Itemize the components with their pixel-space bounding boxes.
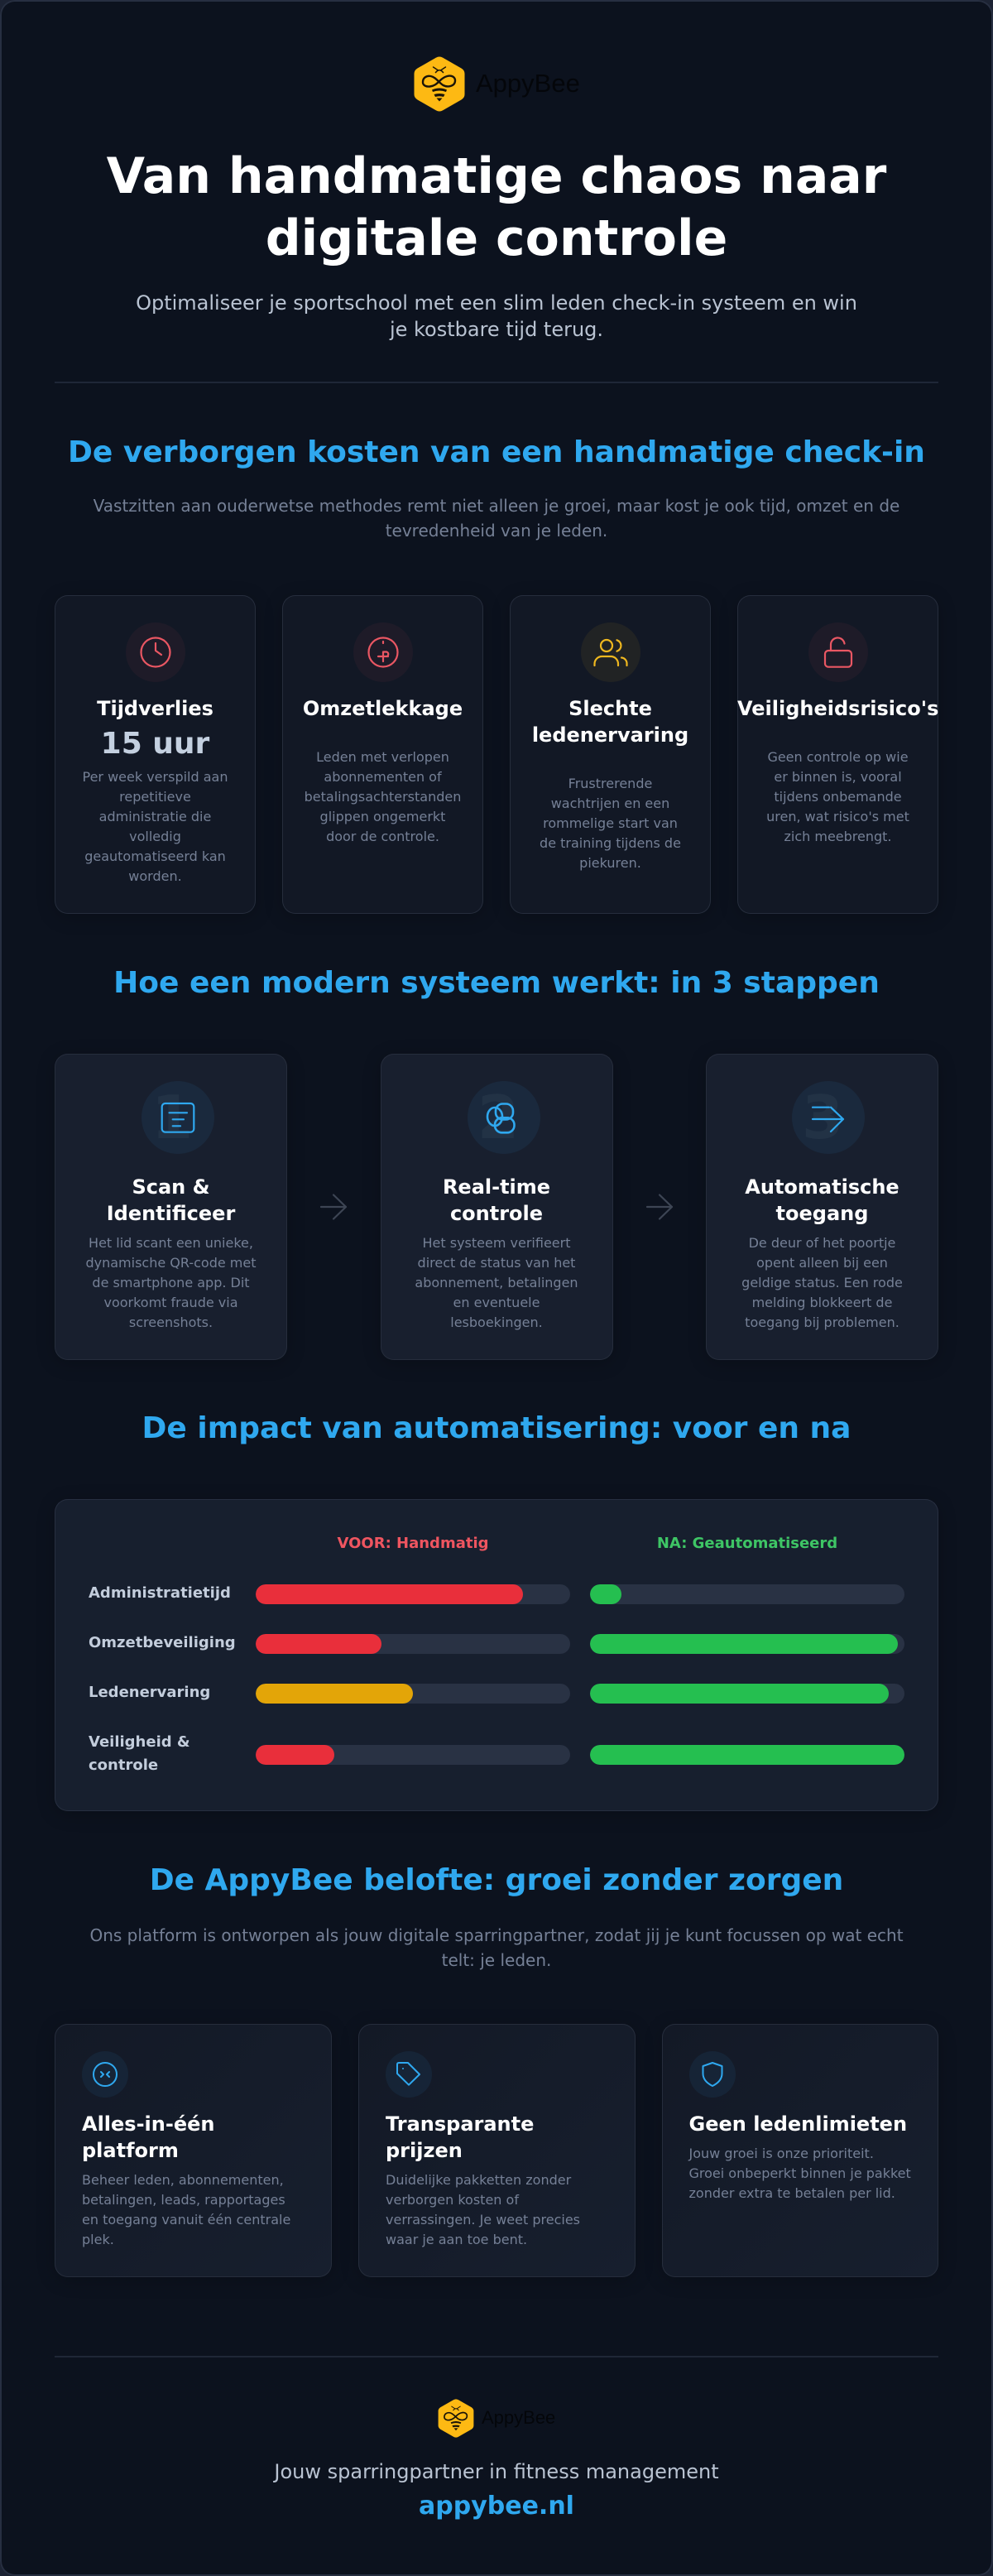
step text: voorkomt fraude via <box>103 1295 238 1310</box>
bar: after 95% <box>590 1684 904 1704</box>
panel: before and after bar chart <box>55 1499 938 1811</box>
panel: Omzetlekkage <box>282 595 483 914</box>
card text: wachtrijen en een <box>551 795 669 811</box>
card title <box>386 2112 534 2162</box>
bar: after 98% <box>590 1634 904 1654</box>
bar: before 40% <box>256 1634 570 1654</box>
card title: Tijdverlies <box>97 697 213 720</box>
step text: Het lid scant een unieke, <box>89 1235 253 1250</box>
row label: Veiligheid en controle: Veiligheid & <box>89 1733 190 1751</box>
panel: step 3 <box>706 1054 938 1360</box>
panel: step 1 <box>55 1054 287 1360</box>
column header: before: VOOR: Handmatig <box>337 1535 488 1552</box>
card text: verrassingen. Je weet precies <box>386 2212 580 2227</box>
step title: toegang <box>776 1202 868 1225</box>
row label: Administratietijd: Administratietijd <box>89 1584 231 1602</box>
step text: geldige status. Een rode <box>741 1275 903 1290</box>
bar: before 50% <box>256 1684 570 1704</box>
title: digitale controle <box>266 209 727 267</box>
step title: Identificeer <box>107 1202 235 1225</box>
card text <box>83 769 228 884</box>
card text: worden. <box>128 868 182 884</box>
card title: Veiligheidsrisico's <box>737 697 938 720</box>
icon: real-time check <box>468 1081 540 1154</box>
subtitle: Optimaliseer je sportschool met een slim leden check-in systeem en win <box>136 291 857 315</box>
card text: er binnen is, vooral <box>774 769 902 785</box>
step text: en eventuele <box>453 1295 540 1310</box>
card text: uren, wat risico's met <box>766 809 909 824</box>
footer tagline: Jouw sparringpartner in fitness management <box>274 2460 719 2483</box>
bar: before 85% <box>256 1584 570 1604</box>
card title: prijzen <box>386 2139 463 2162</box>
step title: Automatische <box>745 1175 899 1199</box>
card text: piekuren. <box>579 855 641 871</box>
row label: Veiligheid en controle <box>89 1733 190 1774</box>
card text: de training tijdens de <box>540 835 681 851</box>
step text: opent alleen bij een <box>756 1255 888 1270</box>
icon: bee hexagon <box>414 56 465 111</box>
step text: De deur of het poortje <box>749 1235 895 1250</box>
row label: Veiligheid en controle: controle <box>89 1757 158 1774</box>
card text: Leden met verlopen <box>316 749 449 765</box>
step text: abonnement, betalingen <box>415 1275 578 1290</box>
step title <box>107 1175 235 1225</box>
card title <box>82 2112 214 2162</box>
card text: Geen controle op wie <box>767 749 909 765</box>
heading: promise: De AppyBee belofte: groei zonder zorgen <box>150 1863 843 1897</box>
card text: Frustrerende <box>568 776 652 791</box>
logo wordmark: AppyBee <box>482 2407 555 2428</box>
card text: waar je aan toe bent. <box>386 2232 527 2247</box>
card text <box>688 2146 911 2200</box>
card text: plek. <box>82 2232 114 2247</box>
card text <box>305 749 461 844</box>
card text: volledig <box>129 829 181 844</box>
card text: geautomatiseerd kan <box>84 848 226 864</box>
step title: Real-time <box>443 1175 550 1199</box>
step title <box>745 1175 899 1225</box>
card text: zich meebrengt. <box>784 829 892 844</box>
intro text: promise: telt: je leden. <box>442 1950 551 1970</box>
step text: lesboekingen. <box>450 1314 543 1329</box>
card title: ledenervaring <box>532 723 688 747</box>
card text: Groei onbeperkt binnen je pakket <box>688 2165 911 2180</box>
card title: Transparante <box>386 2112 534 2136</box>
intro text: hidden costs: tevredenheid van je leden. <box>386 521 607 541</box>
icon: open lock <box>808 622 868 682</box>
card text: glippen ongemerkt <box>320 809 445 824</box>
card title: Omzetlekkage <box>303 697 463 720</box>
arrow: step 2 to 3 <box>646 1194 673 1220</box>
footer link: appybee.nl <box>419 2492 574 2520</box>
heading: three steps: Hoe een modern systeem werkt: in 3 stappen <box>113 966 880 1000</box>
statistic: 15 uur <box>101 727 209 760</box>
intro text: promise: Ons platform is ontworpen als jouw digitale sparringpartner, zodat jij je kunt focussen op wat echt <box>89 1925 904 1945</box>
step text: screenshots. <box>129 1314 213 1329</box>
icon: real-time check: 2 <box>477 1083 519 1152</box>
step text <box>85 1235 257 1329</box>
heading: hidden costs: De verborgen kosten van een handmatige check-in <box>68 435 925 469</box>
card text: Beheer leden, abonnementen, <box>82 2172 284 2187</box>
card text: Per week verspild aan <box>83 769 228 785</box>
icon: scan <box>142 1081 214 1154</box>
card text <box>540 776 681 871</box>
step title: Scan & <box>132 1175 210 1199</box>
card text <box>386 2172 580 2247</box>
icon: coin <box>353 622 413 682</box>
step text <box>415 1235 578 1329</box>
logo wordmark: AppyBee <box>476 69 580 98</box>
card text: en toegang vanuit één centrale <box>82 2212 290 2227</box>
panel: Veiligheidsrisico's <box>737 595 938 914</box>
title: Van handmatige chaos naar <box>107 147 886 205</box>
icon: users <box>581 622 640 682</box>
step text <box>741 1235 903 1329</box>
bar: after 10% <box>590 1584 904 1604</box>
panel: step 2 <box>381 1054 612 1360</box>
card title <box>532 697 688 747</box>
icon: bee hexagon <box>439 2399 473 2438</box>
card text: Duidelijke pakketten zonder <box>386 2172 571 2187</box>
bar: before 25% <box>256 1745 570 1765</box>
card text: zonder extra te betalen per lid. <box>688 2185 895 2200</box>
icon: automatic entry <box>792 1081 865 1154</box>
card text: verborgen kosten of <box>386 2192 519 2207</box>
step title <box>443 1175 550 1225</box>
icon: price tag <box>386 2051 432 2098</box>
step title: controle <box>450 1202 543 1225</box>
footer logo <box>439 2399 555 2438</box>
icon: clock <box>126 622 185 682</box>
bar: after 100% <box>590 1745 904 1765</box>
subtitle <box>136 291 857 341</box>
panel: transparent pricing <box>358 2024 636 2277</box>
card text: abonnementen of <box>324 769 442 785</box>
step text: direct de status van het <box>418 1255 575 1270</box>
icon: automatic entry: 3 <box>802 1083 843 1152</box>
card title: Geen ledenlimieten <box>688 2112 907 2136</box>
card text: tijdens onbemande <box>774 789 902 805</box>
intro text: hidden costs: Vastzitten aan ouderwetse methodes remt niet alleen je groei, maar kost je ook tijd, omzet en de <box>94 496 899 516</box>
panel: Tijdverlies <box>55 595 256 914</box>
step text: melding blokkeert de <box>752 1295 892 1310</box>
card text: betalingsachterstanden <box>305 789 461 805</box>
subtitle: je kostbare tijd terug. <box>390 318 603 341</box>
card title: Alles-in-één <box>82 2112 214 2136</box>
intro text: promise <box>89 1925 904 1970</box>
card text <box>766 749 909 844</box>
arrow: step 1 to 2 <box>320 1194 347 1220</box>
card text: administratie die <box>99 809 211 824</box>
row label: Omzetbeveiliging: Omzetbeveiliging <box>89 1634 236 1651</box>
card text <box>82 2172 290 2247</box>
intro text: hidden costs <box>93 496 899 541</box>
icon: scan: 1 <box>151 1083 193 1152</box>
card text: repetitieve <box>119 789 191 805</box>
card title: platform <box>82 2139 179 2162</box>
title <box>106 147 887 267</box>
card title: Slechte <box>568 697 652 720</box>
icon: circle with arrows <box>82 2051 128 2098</box>
heading: impact: De impact van automatisering: voor en na <box>142 1411 851 1445</box>
panel: no member limits <box>662 2024 938 2277</box>
column header: after: NA: Geautomatiseerd <box>657 1535 837 1552</box>
step text: dynamische QR-code met <box>85 1255 257 1270</box>
panel: all-in-one <box>55 2024 331 2277</box>
step text: Het systeem verifieert <box>423 1235 570 1250</box>
card text: rommelige start van <box>543 815 678 831</box>
card text: betalingen, leads, rapportages <box>82 2192 285 2207</box>
card text: door de controle. <box>326 829 439 844</box>
step text: toegang bij problemen. <box>745 1314 899 1329</box>
header logo <box>414 56 580 111</box>
row label: Ledenervaring: Ledenervaring <box>89 1684 210 1701</box>
step text: de smartphone app. Dit <box>92 1275 250 1290</box>
panel: Slechte ledenervaring <box>510 595 711 914</box>
icon: shield <box>689 2051 736 2098</box>
card text: Jouw groei is onze prioriteit. <box>688 2146 874 2160</box>
